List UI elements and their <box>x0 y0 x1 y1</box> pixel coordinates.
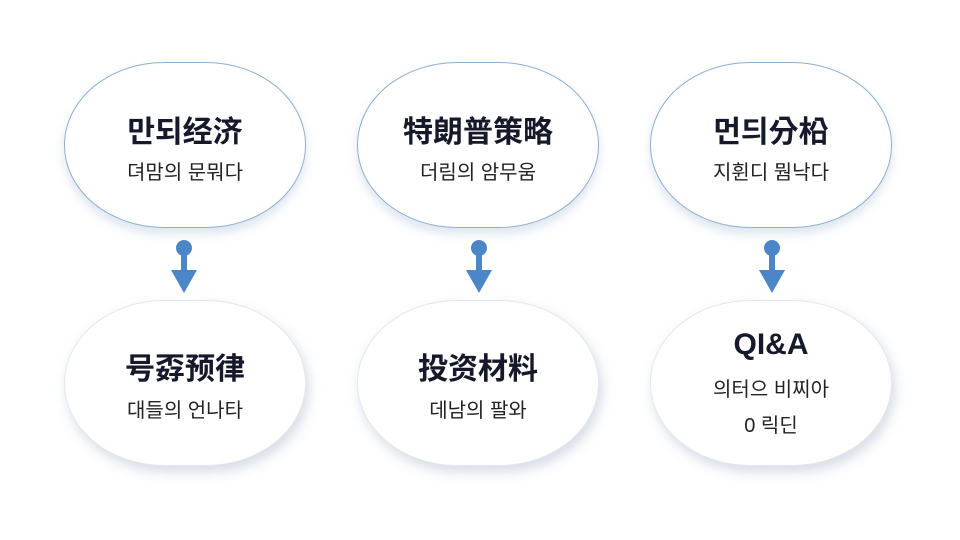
title: QI&A <box>734 328 808 361</box>
box: bottom right <box>650 300 892 466</box>
subtitle: 데남의 팔와 <box>429 400 527 422</box>
box: top left <box>64 62 306 228</box>
subtitle: 의터으 비찌아 <box>713 379 829 401</box>
box: top middle <box>357 62 599 228</box>
title: 特朗普策略 <box>403 116 553 149</box>
subtitle: 뎌맘의 문뭐다 <box>127 162 243 184</box>
title: 먼듸分柗 <box>713 116 829 149</box>
subtitle: 0 릭딘 <box>744 415 798 437</box>
arrow: left <box>171 240 197 293</box>
subtitle: 대들의 언나타 <box>127 400 243 422</box>
title: 만되经济 <box>127 116 243 149</box>
box: bottom left <box>64 300 306 466</box>
subtitle: 지휜디 뭠낙다 <box>713 162 829 184</box>
arrow: middle <box>466 240 492 293</box>
box: bottom middle <box>357 300 599 466</box>
subtitle <box>713 379 829 437</box>
arrow: right <box>759 240 785 293</box>
title: 号孬预律 <box>125 353 245 386</box>
subtitle: 더림의 암무움 <box>420 162 536 184</box>
box: top right <box>650 62 892 228</box>
title: 投资材料 <box>418 353 538 386</box>
